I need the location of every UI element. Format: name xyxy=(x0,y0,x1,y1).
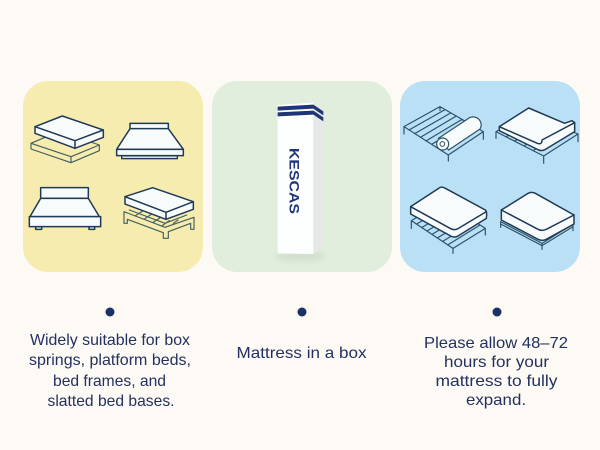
bullet: column 1 xyxy=(106,308,114,316)
text: bed base description: Widely suitable for box xyxy=(30,332,190,349)
text: expansion note: expand. xyxy=(466,392,526,409)
logo text: KESCAS xyxy=(286,148,302,214)
bullet: column 2 xyxy=(298,308,306,316)
icon: mattress on box spring xyxy=(31,116,103,163)
text: bed base description xyxy=(29,332,191,410)
icon: slatted bed base xyxy=(124,188,194,238)
icon: bed frame xyxy=(29,188,101,229)
text: expansion note: Please allow 48–72 xyxy=(424,335,568,352)
text: expansion note: mattress to fully xyxy=(436,373,558,390)
icon: box xyxy=(278,103,323,254)
icon: mattress above slats xyxy=(411,187,487,253)
icon: bed on platform xyxy=(117,123,183,159)
text: expansion note xyxy=(424,335,568,409)
text: bed base description: springs, platform beds, xyxy=(29,352,191,369)
icon: unrolling mattress on slats xyxy=(404,107,483,161)
text: bed base description: bed frames, and xyxy=(53,373,166,390)
text: bed base description: slatted bed bases. xyxy=(48,393,174,410)
panel: expansion steps xyxy=(400,81,580,272)
panel: mattress box xyxy=(212,81,392,272)
panel: bed base compatibility xyxy=(23,81,203,272)
icon: fully expanded mattress xyxy=(501,192,574,249)
bullet: column 3 xyxy=(492,308,502,316)
icon: unfolding mattress on slats xyxy=(496,108,578,163)
text: expansion note: hours for your xyxy=(444,354,550,371)
text: mattress in a box: Mattress in a box xyxy=(236,345,366,362)
